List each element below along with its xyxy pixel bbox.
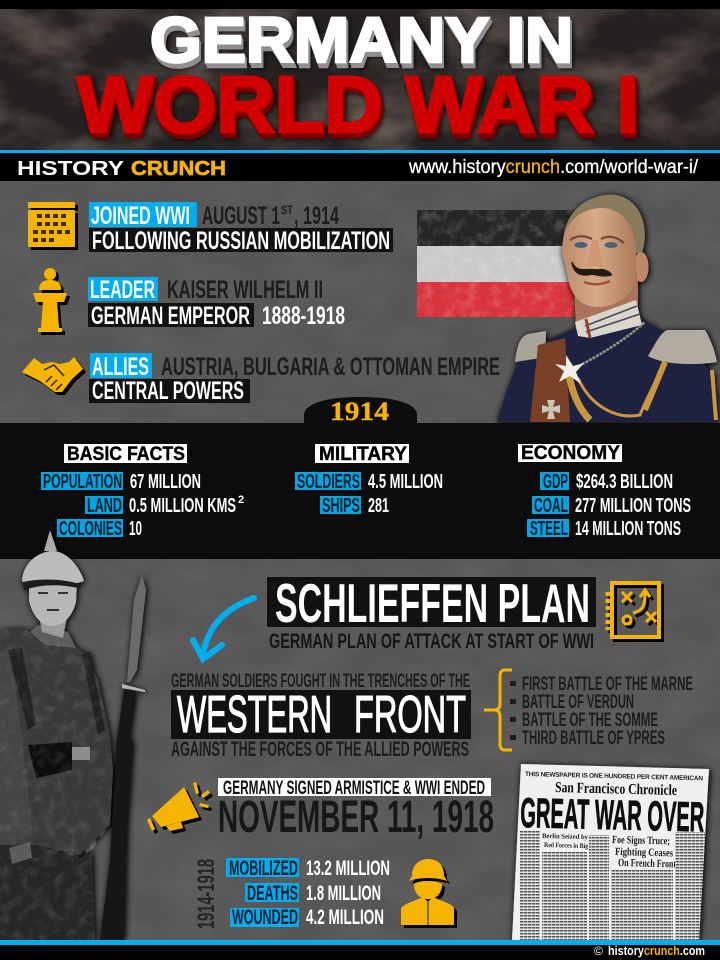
- wounded row: WOUNDED: [232, 906, 298, 929]
- icon: handshake: [22, 357, 83, 392]
- heading: military: MILITARY: [319, 444, 407, 465]
- chip: allies: ALLIES: [92, 353, 149, 381]
- body columns: [520, 830, 705, 940]
- black bar: [0, 945, 720, 960]
- mobilized row: 13.2 MILLION: [306, 857, 390, 880]
- mobilized row: MOBILIZED: [229, 857, 298, 880]
- copyright: ©: [594, 944, 603, 958]
- footer site: historycrunch.com: [608, 943, 705, 958]
- coal row: COAL: [534, 495, 568, 517]
- brand bar: CRUNCH: [131, 158, 226, 180]
- chip: leader: [88, 276, 158, 304]
- land row: [85, 494, 244, 517]
- blue rule: [0, 940, 720, 945]
- Central Powers: [89, 377, 250, 405]
- gold aiguillette: [568, 362, 716, 420]
- chip: joined WWI: [89, 202, 197, 230]
- soldiers row: SOLDIERS: [297, 471, 360, 493]
- population row: 67 MILLION: [130, 471, 201, 493]
- German Emperor: GERMAN EMPEROR: [91, 302, 250, 330]
- column: basic facts: [41, 444, 244, 540]
- icon: battle plan: [608, 583, 659, 637]
- neck: [38, 610, 68, 638]
- armistice label: GERMANY SIGNED ARMISTICE & WWI ENDED: [223, 778, 485, 799]
- wounded row: 4.2 MILLION: [306, 906, 384, 929]
- subheads: [542, 833, 675, 868]
- GDP row: [540, 471, 673, 493]
- subheads: Fighting Ceases: [615, 846, 674, 859]
- orders sash: [530, 338, 570, 422]
- neck: [574, 280, 638, 330]
- soldiers row: [295, 471, 443, 493]
- year tab: 1914: [330, 397, 389, 426]
- newspaper: Great War Over: [512, 764, 709, 940]
- coat: [0, 628, 113, 855]
- fact: joined WWI: [28, 202, 393, 255]
- land row: 2: [238, 494, 244, 506]
- helmet brim: [23, 580, 80, 590]
- column: economy: [518, 443, 691, 540]
- website url: www.historycrunch.com/world-war-i/: [408, 157, 699, 178]
- following Russian mobilization: FOLLOWING RUSSIAN MOBILIZATION: [92, 227, 390, 255]
- top black strip: [0, 0, 720, 9]
- icon: calendar: [28, 202, 75, 247]
- portrait: Kaiser Wilhelm II: [497, 195, 717, 422]
- photo grain: [0, 625, 115, 940]
- icon: megaphone: [147, 782, 210, 831]
- date: , 1914: [294, 202, 339, 230]
- date: ST: [281, 203, 294, 217]
- left epaulette: [515, 331, 546, 362]
- title: World War I: WORLD WAR I: [77, 60, 639, 149]
- helmet: [22, 551, 84, 584]
- deaths row: [245, 882, 381, 905]
- following Russian mobilization: [89, 227, 393, 255]
- casualties: [193, 857, 454, 929]
- ships row: SHIPS: [322, 495, 360, 517]
- rifle and bayonet: [100, 575, 146, 940]
- GDP row: GDP: [543, 471, 568, 493]
- deaths row: DEATHS: [247, 882, 298, 905]
- chip: joined WWI: JOINED WWI: [91, 202, 190, 230]
- blue rule: [0, 150, 720, 153]
- brand bar: HISTORY: [17, 158, 125, 180]
- name: KAISER WILHELM II: [167, 276, 323, 304]
- sleeve: [0, 652, 33, 848]
- photo: German soldier with rifle: [0, 530, 146, 940]
- hair: [563, 195, 645, 255]
- lead-in text: GERMAN SOLDIERS FOUGHT IN THE TRENCHES OF THE: [171, 671, 470, 692]
- flag of the German Empire: [417, 210, 575, 317]
- lower cross: [542, 400, 560, 419]
- land row: 0.5 MILLION KMS: [129, 495, 236, 517]
- steel row: STEEL: [530, 518, 568, 540]
- striped collar: [575, 300, 642, 338]
- Western Front: [171, 670, 693, 761]
- brace: [484, 670, 512, 750]
- date: NOVEMBER 11, 1918: [218, 791, 494, 842]
- armistice: [147, 778, 494, 842]
- heading: FRONT: [354, 686, 466, 744]
- face: [562, 208, 637, 307]
- chain: [575, 322, 645, 368]
- Schlieffen Plan: [267, 572, 659, 653]
- closing text: AGAINST THE FORCES OF THE ALLIED POWERS: [171, 738, 469, 761]
- chip: leader: LEADER: [90, 276, 155, 304]
- eyes and brows: [570, 236, 624, 248]
- coal row: [532, 495, 691, 517]
- collar: [30, 625, 76, 648]
- year tab: [304, 397, 417, 426]
- Central Powers: CENTRAL POWERS: [92, 377, 244, 405]
- soldiers row: 4.5 MILLION: [368, 471, 443, 493]
- heading: basic facts: BASIC FACTS: [67, 444, 185, 465]
- moustache and nose: [572, 240, 611, 284]
- GDP row: $264.3 BILLION: [576, 471, 673, 493]
- face: [29, 582, 77, 626]
- straps: [8, 648, 105, 735]
- belt pouch: [28, 742, 90, 778]
- brand bar: [0, 153, 720, 181]
- date: AUGUST 1: [202, 202, 280, 230]
- arrow: [193, 598, 254, 659]
- masthead: San Francisco Chronicle: [555, 780, 678, 799]
- icon: soldier: [401, 859, 454, 925]
- colonies row: 10: [129, 518, 142, 540]
- title: Germany in: GERMANY IN: [150, 4, 573, 76]
- heading: economy: ECONOMY: [521, 443, 620, 464]
- statistics band 1914: [0, 397, 720, 559]
- German Emperor: [88, 302, 254, 330]
- subheads: Foe Signs Truce;: [612, 834, 670, 847]
- steel row: [527, 518, 681, 540]
- fact: leader: [33, 268, 345, 332]
- column: military: [295, 444, 443, 517]
- allied nations: AUSTRIA, BULGARIA & OTTOMAN EMPIRE: [161, 353, 500, 381]
- reign years: 1888-1918: [262, 302, 345, 330]
- deaths row: 1.8 MILLION: [306, 882, 381, 905]
- icon: podium speaker: [33, 268, 67, 332]
- heading: WESTERN: [177, 686, 332, 744]
- ships row: 281: [368, 495, 389, 517]
- fact: allies: [22, 353, 500, 405]
- iron cross: [555, 355, 584, 384]
- battles list: BATTLE OF VERDUN: [522, 692, 634, 713]
- right epaulette: [648, 330, 717, 364]
- hand: [9, 842, 32, 864]
- land row: LAND: [87, 495, 122, 517]
- subheads: Red Forces in Big: [544, 841, 589, 850]
- top line: THIS NEWSPAPER IS ONE HUNDRED PER CENT AMERICAN: [525, 771, 703, 782]
- population row: POPULATION: [43, 471, 122, 493]
- ear: [634, 252, 648, 282]
- stone texture banner: [0, 9, 720, 150]
- facial features: [38, 593, 68, 610]
- footer: [0, 940, 720, 960]
- header banner: [0, 0, 720, 181]
- vertical years: 1914-1918: [193, 859, 220, 929]
- subheads: Berlin Seized by: [542, 832, 589, 841]
- trousers: [0, 845, 95, 940]
- subheads: On French Front: [618, 857, 676, 870]
- armistice label: [218, 778, 491, 799]
- helmet spike: [44, 530, 57, 551]
- uniform: [497, 318, 717, 422]
- battles list: [510, 674, 693, 749]
- colonies row: COLONIES: [59, 518, 122, 540]
- black band: [0, 423, 720, 559]
- chip: allies: [90, 353, 152, 381]
